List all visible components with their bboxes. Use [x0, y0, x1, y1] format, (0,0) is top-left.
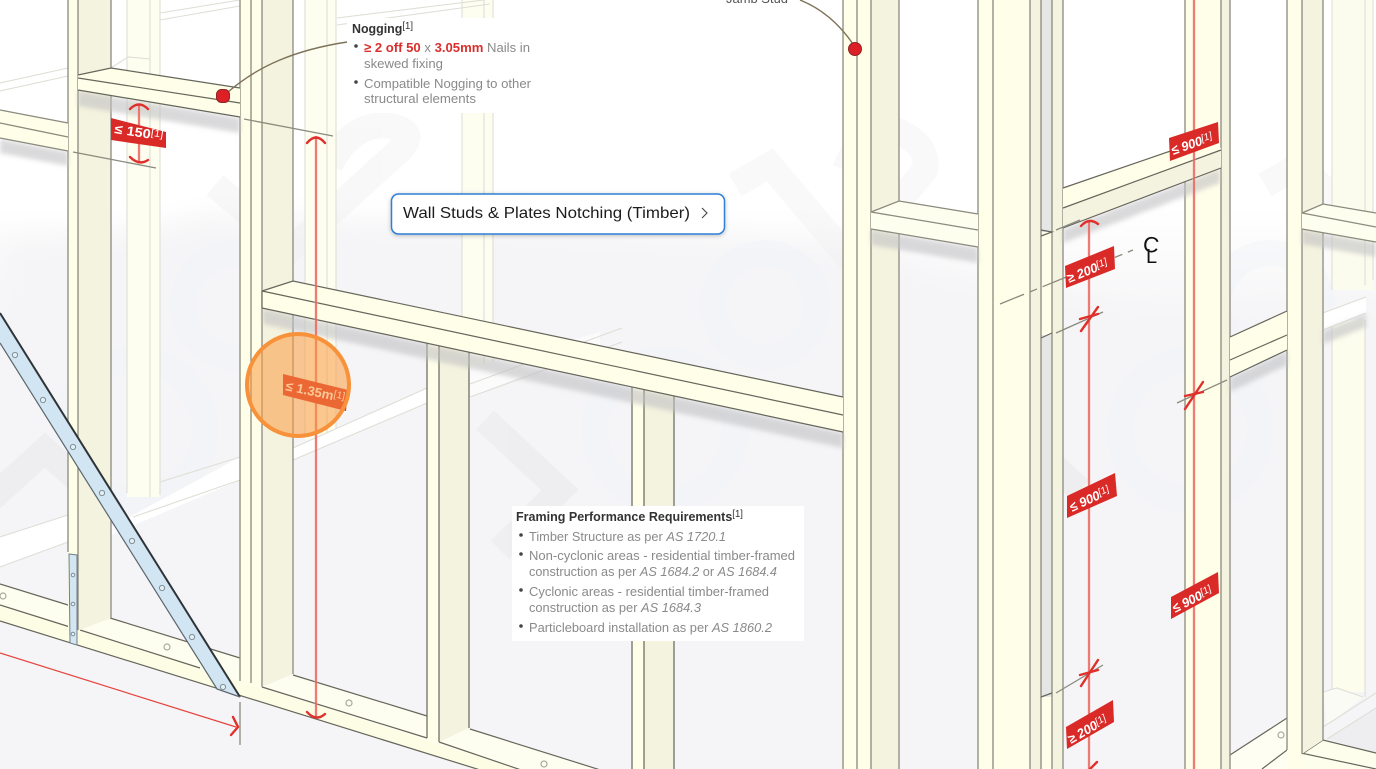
tag: 150: ≤ 150	[114, 121, 148, 141]
diagonal metal brace	[0, 313, 240, 697]
panel: framing performance requirements: construction as per AS 1684.3	[529, 600, 702, 615]
tag: 150: [1]	[150, 128, 164, 141]
nogging left	[78, 68, 240, 117]
tag: 1.35m: ≤ 1.35m	[284, 378, 334, 403]
panel: framing performance requirements	[512, 506, 804, 641]
panel: framing performance requirements: Framing Performance Requirements	[516, 509, 741, 524]
tag: 900 right: [1]	[1198, 584, 1214, 599]
button: wall studs and plates notching	[392, 194, 724, 234]
stud D	[632, 382, 674, 769]
stud A	[68, 0, 111, 640]
tag: 900 right: ≤ 900	[1170, 588, 1205, 616]
stud E	[843, 0, 899, 769]
tag: 200 upper: ≥ 200	[1065, 260, 1100, 286]
callout: jamb stud	[726, 0, 862, 56]
stud C	[427, 340, 469, 742]
tag: 1.35m: [1]	[333, 389, 346, 403]
nogging far left	[0, 110, 68, 151]
dimension lines	[73, 119, 1227, 745]
right corner plate	[1230, 718, 1376, 769]
panel: framing performance requirements: Cyclonic areas - residential timber-framed	[529, 584, 769, 599]
bottom plate	[0, 584, 610, 769]
tag: 150	[111, 118, 166, 148]
button: wall studs and plates notching: Wall Studs & Plates Notching (Timber)	[403, 205, 690, 222]
stud H	[1287, 0, 1323, 769]
tag: 200 lower: ≥ 200	[1065, 717, 1101, 747]
nogging shadows	[0, 91, 1376, 448]
tag: 900 left: ≤ 900	[1067, 487, 1103, 515]
panel: framing performance requirements: construction as per AS 1684.2 or AS 1684.4	[529, 564, 777, 579]
left spacing dimension line	[1080, 220, 1098, 769]
sole plate dimension arrow	[0, 653, 238, 735]
callout: nogging	[347, 18, 540, 113]
metal strap on stud	[69, 554, 77, 645]
panel: framing performance requirements: Timber Structure as per AS 1720.1	[529, 529, 726, 544]
right spacing dimension line	[1185, 0, 1203, 769]
tag: 900 top	[1169, 122, 1219, 161]
cloudy background edge	[0, 215, 1376, 420]
centreline symbol: L	[1146, 246, 1157, 268]
tag: 200 lower: [1]	[1092, 713, 1108, 728]
tag: 200 lower	[1065, 700, 1114, 749]
nogging between jamb studs	[871, 201, 978, 247]
nogging lower right	[1230, 311, 1287, 377]
dimension 1.35m arrow	[307, 136, 325, 718]
callout: nogging: [1]	[402, 21, 413, 32]
tag: 900 left: [1]	[1095, 484, 1111, 499]
panel: framing performance requirements: Non-cyclonic areas - residential timber-framed	[529, 548, 795, 563]
tag: 200 upper	[1065, 246, 1115, 288]
tag: 900 top: [1]	[1199, 131, 1214, 145]
tag: 1.35m	[283, 374, 348, 411]
dimension 150 arrow	[130, 104, 148, 162]
tag: 900 right	[1170, 572, 1219, 619]
tag: 900 top: ≤ 900	[1169, 133, 1205, 158]
panel: framing performance requirements: Particleboard installation as per AS 1860.2	[529, 620, 773, 635]
panel: framing performance requirements: [1]	[732, 509, 743, 520]
callout: nogging: Nogging	[352, 21, 405, 36]
centreline symbol: C	[1141, 231, 1161, 258]
stud B	[240, 0, 293, 687]
callout: nogging: Compatible Nogging to other	[364, 76, 532, 91]
highlight circle	[247, 334, 349, 436]
callout: nogging: skewed fixing	[364, 56, 443, 71]
watermark shapes	[0, 125, 1376, 550]
nogging upper right	[1302, 204, 1376, 242]
tag: 900 left	[1067, 473, 1117, 518]
callout: nogging: ≥ 2 off 50 x 3.05mm Nails in	[364, 40, 530, 55]
stud G	[1185, 0, 1230, 769]
nogging angled rear wall	[1063, 145, 1221, 228]
stud F	[978, 0, 1063, 769]
long nogging	[262, 281, 843, 432]
callout: nogging: structural elements	[364, 91, 477, 106]
leader: nogging	[216, 42, 347, 102]
tag: 200 upper: [1]	[1094, 257, 1109, 271]
